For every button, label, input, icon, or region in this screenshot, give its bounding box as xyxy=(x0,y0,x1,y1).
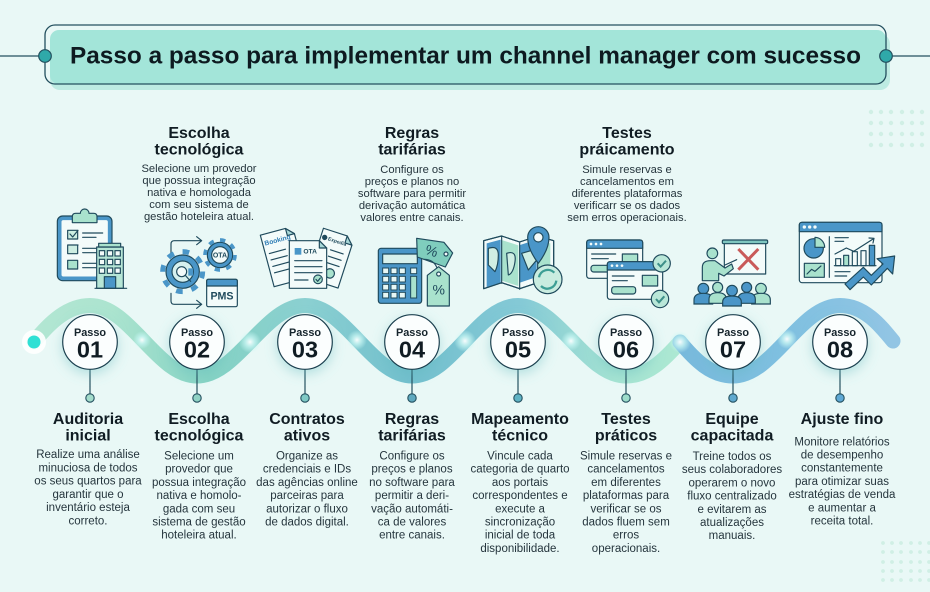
node 02: 02 xyxy=(184,336,210,362)
callout text: que possua integração xyxy=(142,175,256,187)
Booking label: Booking xyxy=(264,234,291,248)
top callout: Testes práicamento xyxy=(567,125,687,224)
node 08: 08 xyxy=(827,336,853,362)
heading 06: Testes xyxy=(601,411,651,428)
node 05: 05 xyxy=(505,336,531,362)
text 07: e evitarem as xyxy=(697,504,767,516)
heading 04: tarifárias xyxy=(378,428,446,444)
callout text: valores entre canais. xyxy=(360,212,464,224)
text 01: garantir que o xyxy=(53,489,123,501)
node 04: 04 xyxy=(399,336,425,362)
text 04: entre canais. xyxy=(379,530,445,542)
text 03: de dados digital. xyxy=(265,516,349,528)
node 02 xyxy=(170,315,224,402)
node 04 xyxy=(385,315,439,402)
text 02: sistema de gestão xyxy=(152,516,246,528)
text 06: plataformas para xyxy=(583,490,670,502)
text 07: manuais. xyxy=(709,530,755,542)
text 08: Monitore relatórios xyxy=(794,436,890,448)
text 06: cancelamentos xyxy=(587,464,665,476)
text 06: erros xyxy=(613,530,639,542)
callout heading: práicamento xyxy=(579,142,675,158)
Expedia label: Expedia xyxy=(327,236,347,248)
icon: OTA contracts xyxy=(260,227,354,288)
step 05 xyxy=(470,315,570,555)
text 07: seus colaboradores xyxy=(682,464,782,476)
callout heading: tecnológica xyxy=(155,142,244,158)
callout heading: Testes xyxy=(602,125,652,142)
text 03: das agências online xyxy=(256,477,358,489)
text 01: correto. xyxy=(68,516,108,528)
text 05: categoria de quarto xyxy=(470,464,570,476)
callout text: nativa e homologada xyxy=(147,187,252,199)
callout text: preços e planos no xyxy=(365,176,459,188)
callout heading: tarifárias xyxy=(378,142,446,158)
icon: dashboard with growth arrow xyxy=(799,222,895,290)
text 07: operarem o novo xyxy=(689,477,775,489)
percent label: % xyxy=(423,241,440,260)
heading 02: Escolha xyxy=(168,411,230,428)
title text: Passo a passo para implementar um channel manager com sucesso xyxy=(70,42,861,70)
text 07: Treine todos os xyxy=(693,451,772,463)
node 08: Passo xyxy=(824,327,856,339)
step 02 xyxy=(152,315,246,542)
icon: calculator and price tags xyxy=(378,238,453,306)
text 08: de desempenho xyxy=(801,450,883,462)
dot pattern top right xyxy=(869,110,924,147)
step 01 xyxy=(34,315,142,528)
text 08: e aumentar a xyxy=(808,502,876,514)
node 03 xyxy=(278,315,332,402)
callout text: verificarr se os dados xyxy=(574,200,681,212)
wave connector: blue segment xyxy=(680,306,893,376)
glow nodes on the wave xyxy=(22,329,797,354)
text 06: Simule reservas e xyxy=(580,450,672,462)
step 03 xyxy=(256,315,358,528)
text 02: nativa e homolo- xyxy=(156,490,242,502)
callout text: software para permitir xyxy=(358,188,466,200)
text 04: preços e planos xyxy=(371,464,453,476)
node 07: 07 xyxy=(720,336,746,362)
text 02: provedor que xyxy=(165,464,233,476)
step 06 xyxy=(580,315,672,555)
text 07: fluxo centralizado xyxy=(687,491,777,503)
text 06: operacionais. xyxy=(592,543,660,555)
heading 08: Ajuste fino xyxy=(801,411,884,428)
node 04: Passo xyxy=(396,327,428,339)
text 06: em diferentes xyxy=(591,477,661,489)
step 04 xyxy=(369,315,455,542)
node 03: Passo xyxy=(289,327,321,339)
callout text: sem erros operacionais. xyxy=(567,212,687,224)
node 06: Passo xyxy=(610,327,642,339)
text 03: credenciais e IDs xyxy=(263,464,351,476)
callout text: cancelamentos em xyxy=(580,176,674,188)
node 01 xyxy=(63,315,117,402)
heading 03: Contratos xyxy=(269,411,345,428)
callout text: com seu sistema de xyxy=(149,199,249,211)
wave connector: green to teal segment xyxy=(34,306,680,376)
text 08: estratégias de venda xyxy=(789,489,896,501)
node 06 xyxy=(599,315,653,402)
text 04: permitir a deri- xyxy=(375,490,449,502)
step 08 xyxy=(789,315,896,528)
heading 01: inicial xyxy=(65,428,111,444)
heading 02: tecnológica xyxy=(155,428,244,444)
dot pattern bottom right xyxy=(881,541,930,582)
callout text: derivação automática xyxy=(359,200,466,212)
node 05: Passo xyxy=(502,327,534,339)
text 02: gada com seu xyxy=(163,503,235,515)
PMS label: PMS xyxy=(210,290,234,302)
node 02: Passo xyxy=(181,327,213,339)
node 07 xyxy=(706,315,760,402)
node 07: Passo xyxy=(717,327,749,339)
text 08: constantemente xyxy=(801,463,883,475)
text 03: autorizar o fluxo xyxy=(266,503,348,515)
text 01: os seus quartos para xyxy=(34,476,142,488)
text 03: Organize as xyxy=(276,450,338,462)
icon: trainer and team xyxy=(694,240,770,306)
callout text: diferentes plataformas xyxy=(572,188,683,200)
node 03: 03 xyxy=(292,336,318,362)
icon: clipboard and hotel xyxy=(57,209,127,288)
callout heading: Escolha xyxy=(168,125,230,142)
text 05: disponibilidade. xyxy=(480,543,560,555)
top callout: Regras tarifárias xyxy=(358,125,466,224)
step 07 xyxy=(682,315,782,542)
text 06: dados fluem sem xyxy=(582,516,670,528)
node 01: Passo xyxy=(74,327,106,339)
heading 05: técnico xyxy=(492,428,548,444)
node 08 xyxy=(813,315,867,402)
text 04: vação automáti- xyxy=(371,503,453,515)
heading 07: capacitada xyxy=(691,428,773,444)
text 01: inventário esteja xyxy=(46,502,130,514)
icon: browser windows with checks xyxy=(587,240,670,308)
heading 07: Equipe xyxy=(705,411,759,428)
heading 03: ativos xyxy=(284,428,330,444)
text 08: receita total. xyxy=(811,516,873,528)
text 05: execute a xyxy=(495,503,546,515)
text 02: possua integração xyxy=(152,477,246,489)
text 08: para otimizar suas xyxy=(795,476,889,488)
node 05 xyxy=(491,315,545,402)
callout text: Simule reservas e xyxy=(582,164,672,176)
heading 05: Mapeamento xyxy=(471,411,569,428)
icon: map with pin and sync xyxy=(484,227,562,294)
text 05: correspondentes e xyxy=(472,490,568,502)
text 04: Configure os xyxy=(379,450,445,462)
text 03: parceiras para xyxy=(270,490,344,502)
text 01: minuciosa de todos xyxy=(38,462,138,474)
text 05: aos portais xyxy=(492,477,548,489)
OTA label: OTA xyxy=(303,249,317,256)
text 01: Realize uma análise xyxy=(36,449,140,461)
text 05: inicial de toda xyxy=(485,530,556,542)
text 04: ca de valores xyxy=(378,516,446,528)
node 06: 06 xyxy=(613,336,639,362)
text 05: Vincule cada xyxy=(487,450,553,462)
text 05: sincronização xyxy=(485,516,555,528)
percent label: % xyxy=(432,282,445,298)
icon: gears with OTA and PMS xyxy=(163,237,237,308)
callout text: Configure os xyxy=(380,164,444,176)
text 07: atualizações xyxy=(700,517,764,529)
top callout: Escolha tecnológica xyxy=(141,125,257,223)
text 06: verificar se os xyxy=(591,503,662,515)
text 02: Selecione um xyxy=(164,450,234,462)
node 01: 01 xyxy=(77,336,103,362)
title banner xyxy=(0,25,930,90)
heading 04: Regras xyxy=(385,411,439,428)
text 04: no software para xyxy=(369,477,455,489)
heading 06: práticos xyxy=(595,428,657,444)
callout heading: Regras xyxy=(385,125,439,142)
callout text: Selecione um provedor xyxy=(141,163,257,175)
OTA label: OTA xyxy=(213,253,227,260)
heading 01: Auditoria xyxy=(53,411,123,428)
callout text: gestão hoteleira atual. xyxy=(144,211,254,223)
text 02: hoteleira atual. xyxy=(161,530,237,542)
